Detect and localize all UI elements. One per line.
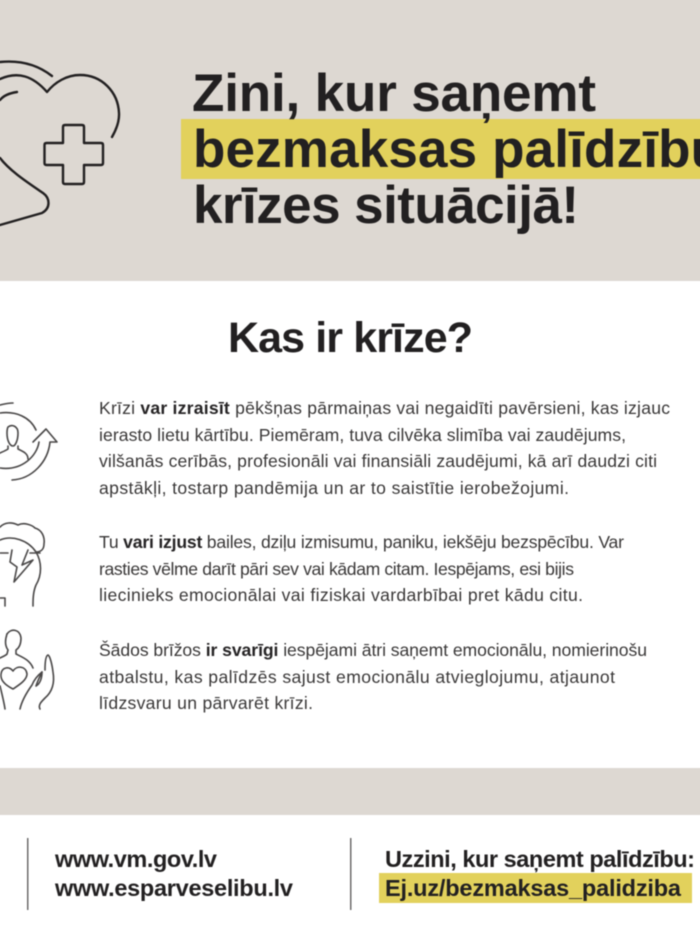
title xyxy=(192,64,700,235)
text: causes of crisis xyxy=(99,398,670,498)
text: importance of support: Šādos brīžos ir svarīgi iespējami ātri saņemt emocionālu, nomierinošu xyxy=(99,639,647,660)
band: separator xyxy=(0,768,700,815)
heading: Kas ir krīze: Kas ir krīze? xyxy=(228,314,473,362)
text: causes of crisis: vilšanās cerībās, profesionāli vai finansiāli zaudējumi, kā arī daudzi citi xyxy=(99,451,657,471)
title: krīzes situācijā! xyxy=(193,176,579,235)
icon: head with lightning xyxy=(0,523,44,606)
icon: heart with cross xyxy=(0,62,119,225)
text: importance of support xyxy=(99,639,647,713)
icon: person in cycle arrows xyxy=(0,403,57,480)
text: importance of support: līdzsvaru un pārvarēt krīzi. xyxy=(99,693,313,713)
icon: person with heart and hand xyxy=(0,630,54,709)
text: causes of crisis: Krīzi var izraisīt pēkšņas pārmaiņas vai negaidīti pavērsieni, kas izjauc xyxy=(99,398,670,418)
text: causes of crisis: apstākļi, tostarp pandēmija un ar to saistītie ierobežojumi. xyxy=(99,478,569,498)
text: feelings xyxy=(99,532,624,605)
panel: header xyxy=(0,0,700,281)
footer: help link: Uzzini, kur saņemt palīdzību: xyxy=(385,846,695,872)
footer: websites xyxy=(27,838,293,910)
footer: help link: Ej.uz/bezmaksas_palidziba xyxy=(385,875,682,901)
text: causes of crisis: ierasto lietu kārtību. Piemēram, tuva cilvēka slimība vai zaudējums, xyxy=(99,425,626,445)
footer: help link xyxy=(350,838,695,910)
text: feelings: liecinieks emocionālai vai fiziskai vardarbībai pret kādu citu. xyxy=(99,585,583,605)
title: Zini, kur saņemt xyxy=(192,64,596,123)
text: importance of support: atbalstu, kas palīdzēs sajust emocionālu atvieglojumu, atjaunot xyxy=(99,667,615,687)
footer: websites: www.esparveselibu.lv xyxy=(54,875,293,901)
text: feelings: rasties vēlme darīt pāri sev vai kādam citam. Iespējams, esi bijis xyxy=(99,559,574,579)
highlight: title line 2 xyxy=(181,119,700,179)
footer: websites: www.vm.gov.lv xyxy=(54,846,217,872)
text: feelings: Tu vari izjust bailes, dziļu izmisumu, paniku, iekšēju bezspēcību. Var xyxy=(99,532,624,552)
